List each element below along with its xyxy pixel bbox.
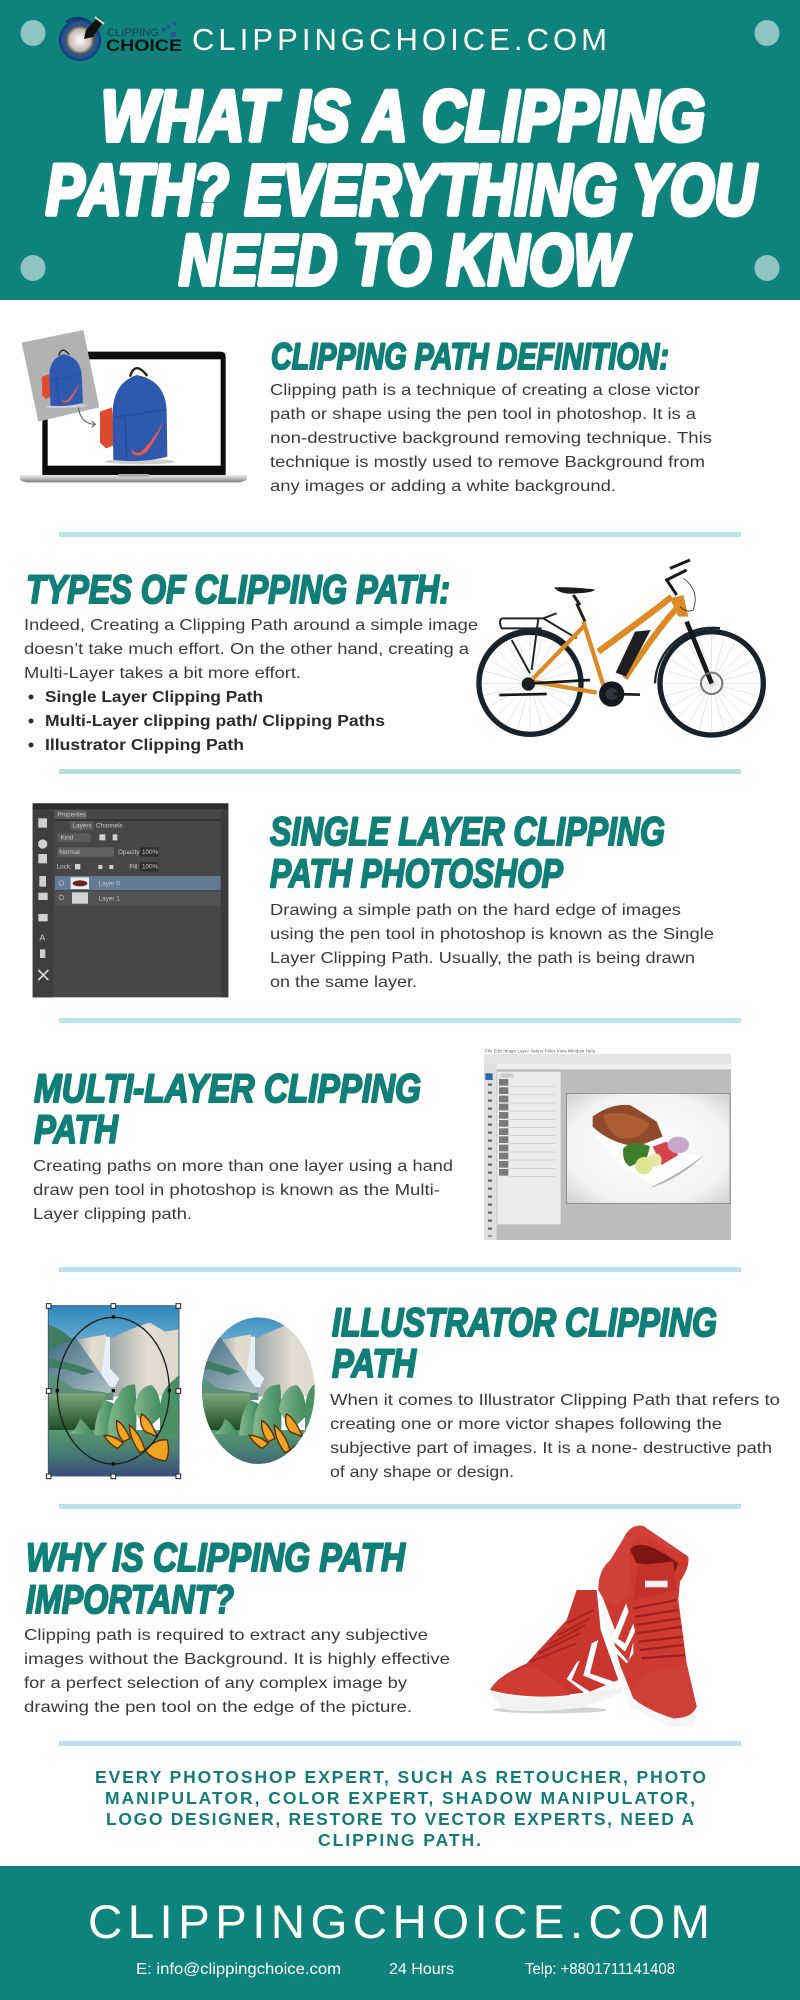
logo (59, 17, 182, 61)
site name: CLIPPINGCHOICE.COM (192, 22, 607, 57)
body text: Creating paths on more than one layer using a hand (33, 1158, 453, 1175)
heading: SINGLE LAYER CLIPPING (270, 810, 665, 854)
footer banner (0, 1866, 800, 2000)
footer site name: CLIPPINGCHOICE.COM (88, 1896, 710, 1949)
bullet list: Single Layer Clipping Path (45, 689, 263, 706)
body text: draw pen tool in photoshop is known as the Multi- (33, 1182, 440, 1199)
illustration: photoshop window with food plate: File Edit Image Layer Select Filter View Window Help (485, 1049, 596, 1054)
body text: on the same layer. (270, 974, 417, 991)
illustration: red high-top sneakers (490, 1526, 697, 1727)
body text: Drawing a simple path on the hard edge of images (270, 902, 681, 919)
bullet list: Illustrator Clipping Path (45, 737, 244, 754)
body text: Layer clipping path. (33, 1206, 192, 1223)
section: types of clipping path (24, 560, 763, 754)
closing statement: MANIPULATOR, COLOR EXPERT, SHADOW MANIPULATOR, (105, 1788, 695, 1808)
contact details: 24 Hours (389, 1961, 454, 1978)
illustration: photoshop layers panel: Properties (57, 812, 86, 819)
main title (46, 78, 757, 300)
body text: for a perfect selection of any complex image by (24, 1675, 407, 1692)
illustration: photoshop layers panel: Lock: (57, 864, 72, 871)
body text: Clipping path is a technique of creating a close victor (270, 382, 701, 399)
body text: non-destructive background removing technique. This (270, 430, 712, 447)
body text: Indeed, Creating a Clipping Path around a simple image (24, 617, 478, 634)
body text (33, 1158, 453, 1223)
body text (330, 1392, 780, 1481)
illustration: orange bicycle (477, 560, 763, 735)
illustration: photoshop layers panel: 100% (142, 849, 159, 856)
body text (270, 382, 712, 495)
body text: Clipping path is required to extract any subjective (24, 1627, 428, 1644)
body text (270, 902, 714, 991)
heading: CLIPPING PATH DEFINITION: (271, 336, 669, 377)
section: clipping path definition (20, 330, 712, 495)
contact details: E: info@clippingchoice.com (136, 1961, 341, 1978)
closing statement: EVERY PHOTOSHOP EXPERT, SUCH AS RETOUCHER, PHOTO (95, 1767, 706, 1787)
logo: CLIPPING (107, 27, 159, 39)
heading: IMPORTANT? (26, 1578, 234, 1622)
bullet list (28, 689, 385, 754)
illustration: photoshop layers panel: Layer 0 (99, 880, 120, 887)
illustration: photoshop layers panel: 100% (142, 864, 159, 871)
illustration: photoshop layers panel: Channels (96, 823, 123, 830)
body text: creating one or more victor shapes following the (330, 1416, 722, 1433)
illustration: photoshop layers panel: Kind (61, 835, 74, 842)
logo: CHOICE (106, 36, 182, 55)
illustration: clipped oval landscape (202, 1317, 315, 1464)
heading (34, 1067, 421, 1152)
illustration: photoshop layers panel: Opacity: (118, 849, 141, 856)
body text: of any shape or design. (330, 1464, 514, 1481)
body text (24, 617, 478, 682)
body text (24, 1627, 450, 1716)
illustration: photoshop layers panel: Layer 1 (99, 895, 120, 902)
main title: WHAT IS A CLIPPING (101, 78, 705, 156)
illustration: photoshop window with food plate (484, 1048, 731, 1240)
logo: The source of innovation (108, 55, 182, 61)
body text: using the pen tool in photoshop is known as the Single (270, 926, 714, 943)
body text: subjective part of images. It is a none- destructive path (330, 1440, 772, 1457)
illustration: photoshop layers panel: Fill: (129, 864, 139, 871)
section: single layer clipping path (33, 803, 714, 997)
bullet list: Multi-Layer clipping path/ Clipping Paths (45, 713, 385, 730)
illustration: landscape with clipping ellipse (46, 1304, 181, 1479)
heading (270, 810, 665, 896)
body text: Multi-Layer takes a bit more effort. (24, 665, 301, 682)
closing statement: LOGO DESIGNER, RESTORE TO VECTOR EXPERTS, NEED A (106, 1809, 694, 1829)
body text: any images or adding a white background. (270, 478, 616, 495)
heading: ILLUSTRATOR CLIPPING (332, 1301, 717, 1345)
heading: PATH (332, 1342, 417, 1386)
heading (332, 1301, 717, 1386)
heading: PATH (34, 1108, 119, 1152)
section: illustrator clipping path (46, 1301, 780, 1481)
heading: WHY IS CLIPPING PATH (26, 1536, 406, 1580)
section: multi-layer clipping path (33, 1048, 731, 1240)
body text: path or shape using the pen tool in photoshop. It is a (270, 406, 696, 423)
illustration: photoshop layers panel (33, 803, 228, 997)
closing statement (95, 1767, 706, 1850)
contact details (136, 1961, 675, 1978)
section: why is clipping path important (24, 1526, 697, 1727)
heading: PATH PHOTOSHOP (270, 852, 563, 896)
illustration: photoshop layers panel: Layers (73, 823, 92, 830)
corner dots (20, 20, 780, 281)
body text: Layer Clipping Path. Usually, the path is being drawn (270, 950, 695, 967)
body text: drawing the pen tool on the edge of the picture. (24, 1699, 412, 1716)
heading: TYPES OF CLIPPING PATH: (26, 568, 450, 612)
body text: images without the Background. It is highly effective (24, 1651, 450, 1668)
illustration: photoshop layers panel: Normal (59, 849, 80, 856)
header banner (0, 0, 800, 300)
body text: technique is mostly used to remove Background from (270, 454, 705, 471)
contact details: Telp: +8801711141408 (525, 1961, 675, 1978)
illustration: laptop with backpack (20, 330, 247, 482)
heading: MULTI-LAYER CLIPPING (34, 1067, 421, 1111)
main title: NEED TO KNOW (179, 222, 632, 300)
closing statement: CLIPPING PATH. (318, 1830, 481, 1850)
body text: doesn’t take much effort. On the other hand, creating a (24, 641, 469, 658)
body text: When it comes to Illustrator Clipping Path that refers to (330, 1392, 780, 1409)
illustration: photoshop layers panel: A (39, 933, 45, 943)
heading (26, 1536, 406, 1622)
